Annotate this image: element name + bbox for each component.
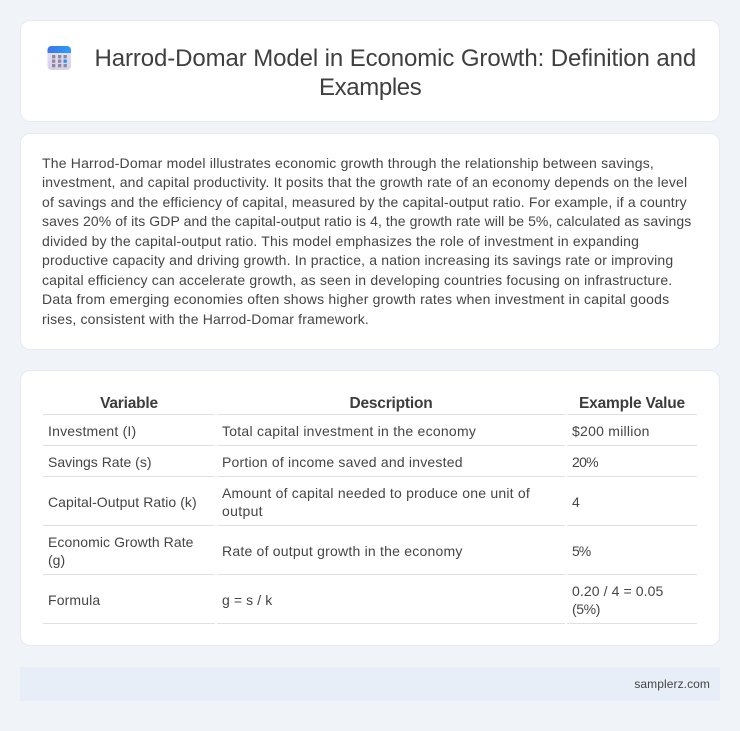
paragraph: rises, consistent with the Harrod-Domar framework. xyxy=(42,311,369,327)
row: capital-output ratio: 4 xyxy=(572,494,580,510)
column headers: Description xyxy=(349,395,433,412)
icon: calendar xyxy=(48,46,71,70)
row: capital-output ratio xyxy=(48,485,580,519)
paragraph: investment, and capital productivity. It posits that the growth rate of an economy depends on the level xyxy=(42,174,687,190)
table panel xyxy=(20,370,720,646)
row: capital-output ratio: output xyxy=(222,503,263,519)
paragraph: capital efficiency can accelerate growth, as seen in developing countries focusing on infrastructure. xyxy=(42,272,672,288)
row: savings rate: Portion of income saved and invested xyxy=(222,454,463,470)
header panel xyxy=(20,20,720,122)
title xyxy=(94,45,696,101)
column headers: Variable xyxy=(100,395,158,412)
footer xyxy=(20,667,720,701)
row: formula: (5%) xyxy=(572,601,600,617)
row: investment: $200 million xyxy=(572,423,650,439)
row: savings rate xyxy=(48,454,598,470)
row: economic growth rate: Rate of output growth in the economy xyxy=(222,543,463,559)
intro text panel xyxy=(20,133,720,350)
footer credit: samplerz.com xyxy=(634,677,710,691)
table xyxy=(43,395,697,624)
row: economic growth rate xyxy=(48,534,591,568)
column headers: Example Value xyxy=(579,395,685,412)
row: savings rate: 20% xyxy=(572,454,598,470)
row: formula: 0.20 / 4 = 0.05 xyxy=(572,583,663,599)
row: economic growth rate: Economic Growth Rate xyxy=(48,534,194,550)
paragraph: The Harrod-Domar model illustrates economic growth through the relationship between savings, xyxy=(42,155,654,171)
row: economic growth rate: (g) xyxy=(48,552,65,568)
paragraph: saves 20% of its GDP and the capital-output ratio is 4, the growth rate will be 5%, calculated as savings xyxy=(42,213,691,229)
row: formula: g = s / k xyxy=(222,592,272,608)
row: investment: Investment (I) xyxy=(48,423,136,439)
title: Examples xyxy=(319,74,421,101)
row: savings rate: Savings Rate (s) xyxy=(48,454,151,470)
column headers xyxy=(100,395,685,412)
paragraph: divided by the capital-output ratio. This model emphasizes the role of investment in expanding xyxy=(42,233,639,249)
paragraph xyxy=(42,155,691,327)
row: capital-output ratio: Amount of capital needed to produce one unit of xyxy=(222,485,530,501)
paragraph: of savings and the efficiency of capital, measured by the capital-output ratio. For example, if a country xyxy=(42,194,687,210)
row: formula xyxy=(48,583,663,617)
title: Harrod-Domar Model in Economic Growth: Definition and xyxy=(94,45,696,72)
row: investment xyxy=(48,423,650,439)
row: investment: Total capital investment in the economy xyxy=(222,423,476,439)
row: capital-output ratio: Capital-Output Ratio (k) xyxy=(48,494,197,510)
row: formula: Formula xyxy=(48,592,100,608)
row: economic growth rate: 5% xyxy=(572,543,590,559)
paragraph: Data from emerging economies often shows higher growth rates when investment in capital goods xyxy=(42,291,669,307)
paragraph: productive capacity and driving growth. In practice, a nation increasing its savings rate or improving xyxy=(42,252,673,268)
